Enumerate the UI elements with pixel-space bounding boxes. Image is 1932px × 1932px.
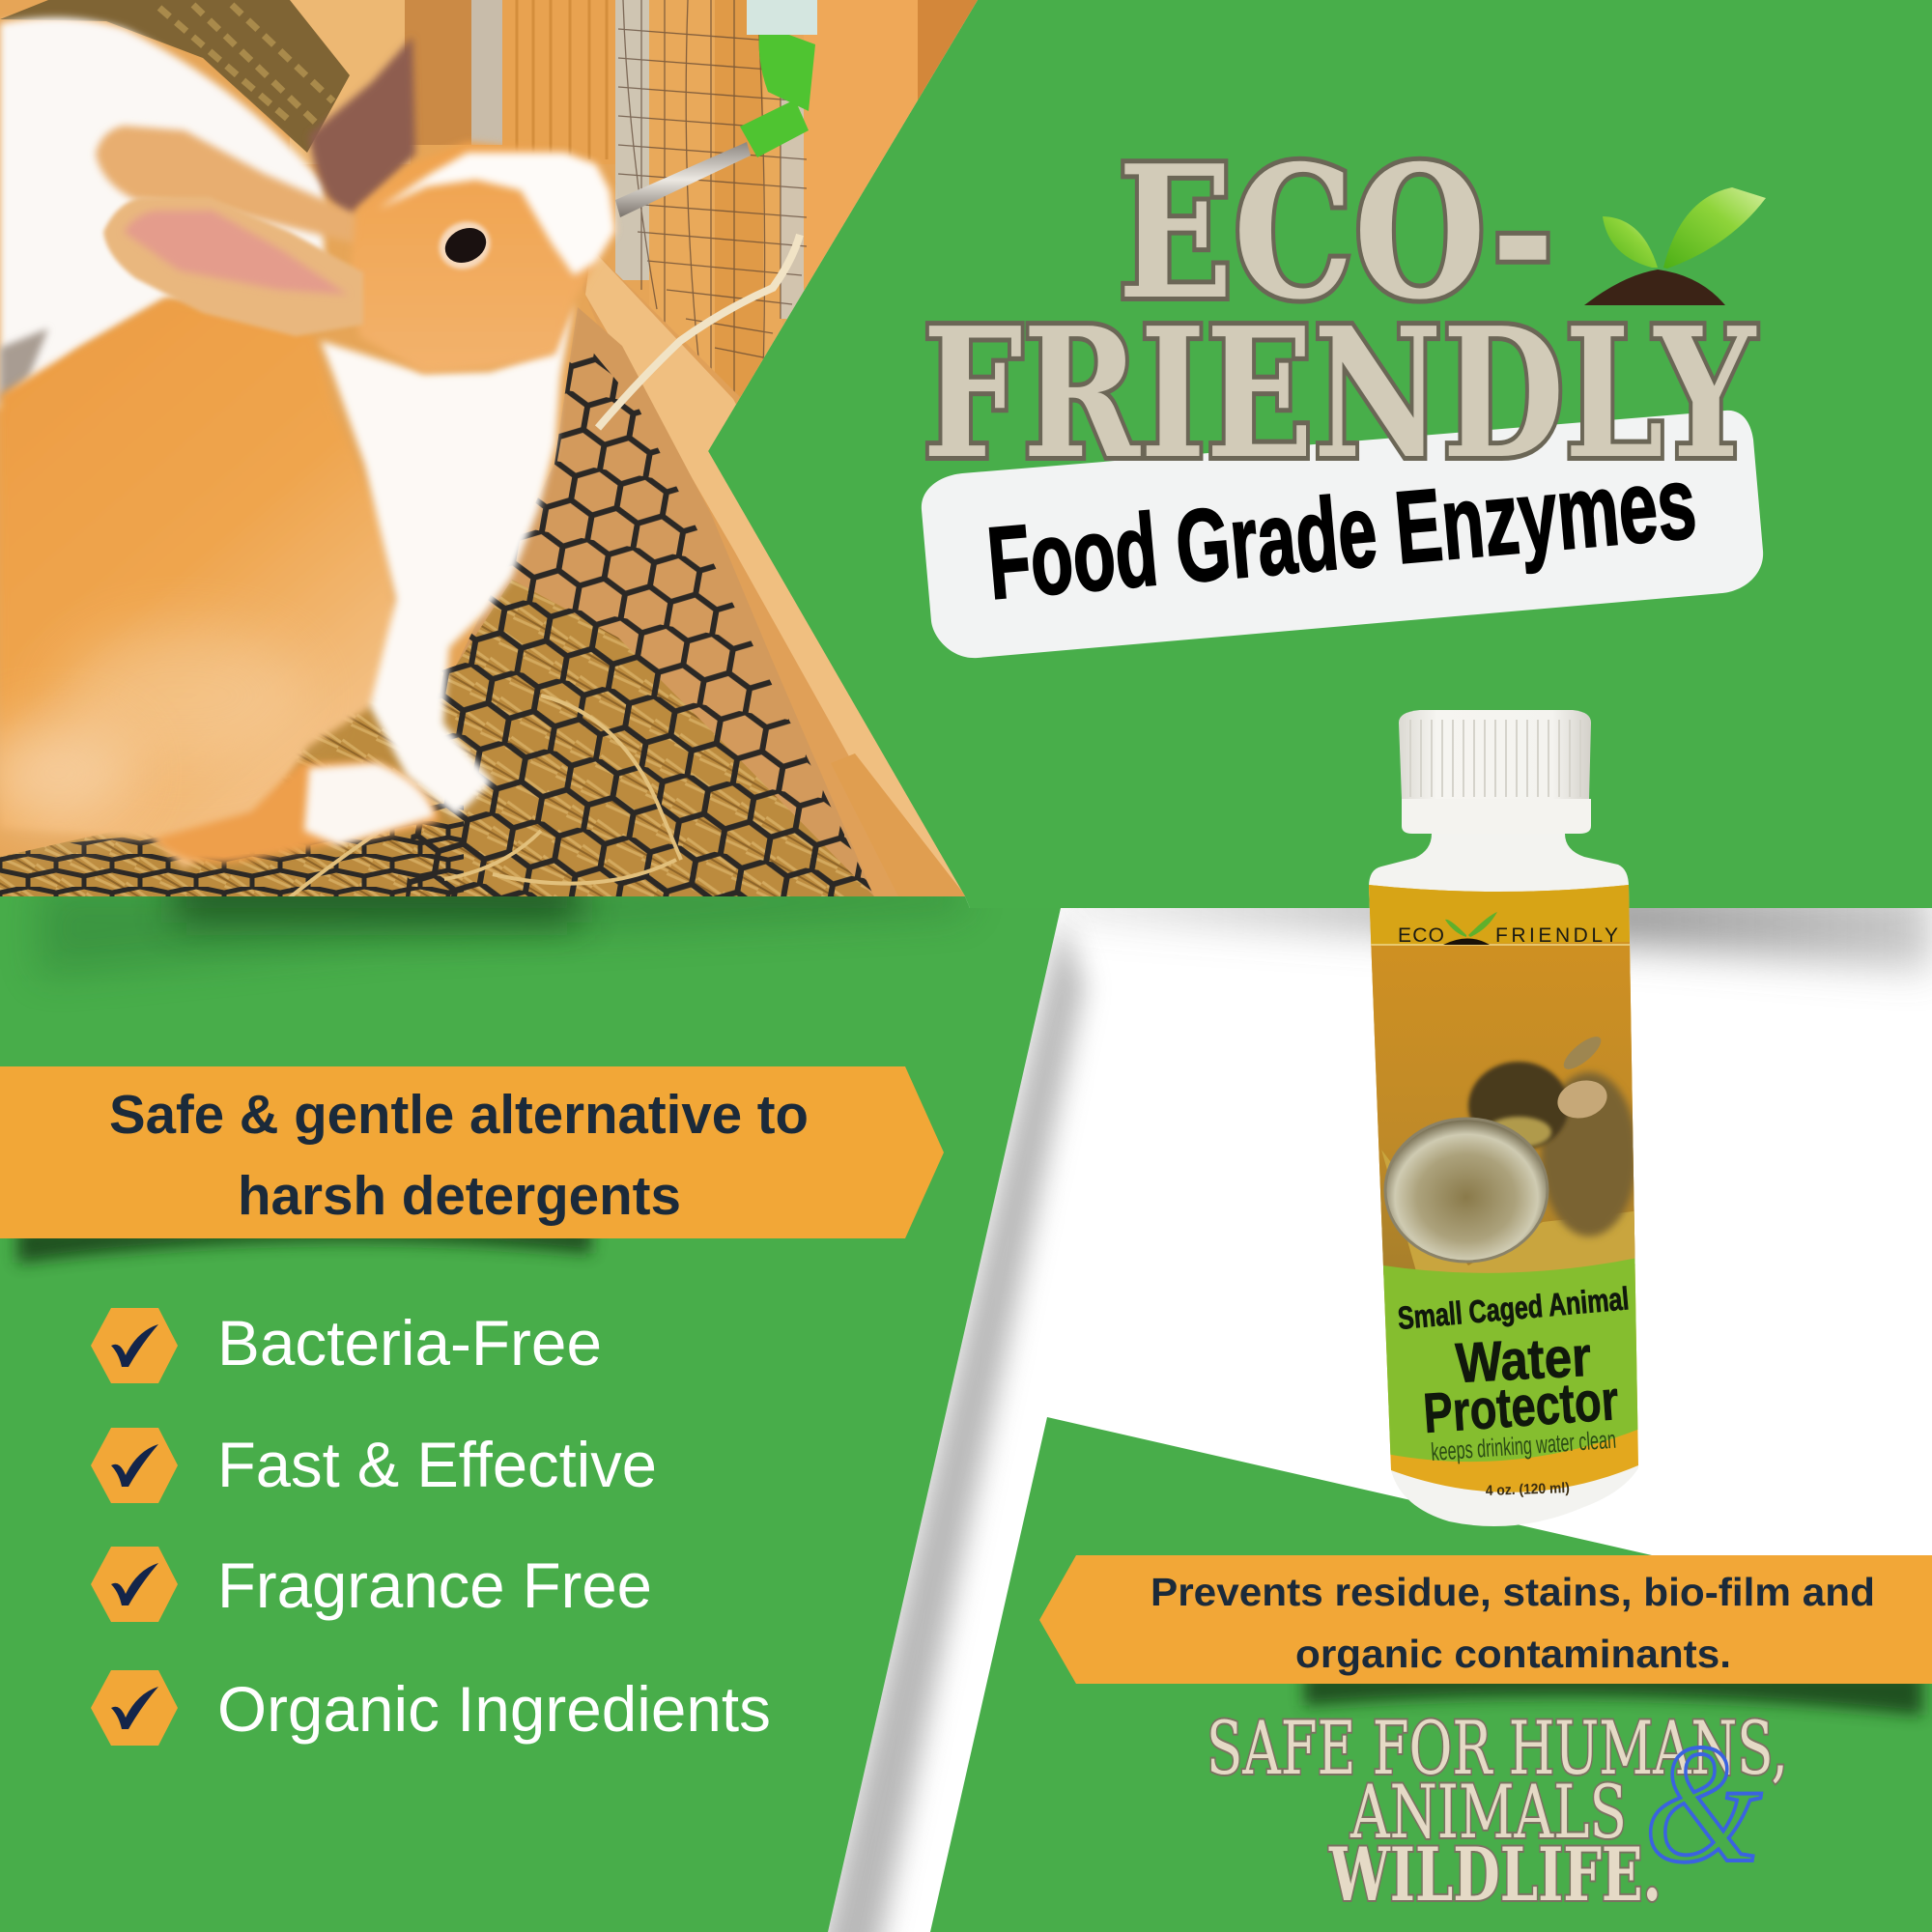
bottle body (1369, 834, 1638, 1526)
ampersand: & (1644, 1710, 1762, 1898)
head (348, 142, 615, 373)
cable tie (598, 235, 800, 428)
banner: prevents residue: organic contaminants. (1295, 1632, 1731, 1676)
banner shadow: right (1304, 1671, 1922, 1716)
label icon: sprout (1443, 912, 1497, 945)
label text: ECO FRIENDLY (1398, 924, 1618, 947)
main rabbit body (0, 298, 401, 868)
item: Bacteria-Free: Bacteria-Free (217, 1307, 602, 1378)
inner ear (124, 211, 348, 295)
tagline: safe for humans, animals and wildlife: WILDLIFE. (1328, 1832, 1662, 1918)
bottle cap (1399, 710, 1591, 799)
green band (1377, 1257, 1642, 1462)
checklist (91, 1307, 771, 1746)
banner: safe and gentle (0, 1066, 944, 1238)
drinking tube (615, 142, 751, 217)
label text: product name: Protector (1421, 1369, 1620, 1445)
panel: top green background (708, 0, 1932, 908)
white muzzle blaze (379, 153, 615, 275)
label text: product name: keeps drinking water clean (1430, 1425, 1617, 1466)
label (1362, 879, 1647, 1517)
label bowl (1385, 1119, 1548, 1262)
panel: bottom-left green (0, 896, 1061, 1932)
banner: prevents residue (1039, 1555, 1932, 1684)
tagline: safe for humans, animals and wildlife: ANIMALS (1350, 1769, 1627, 1855)
subtitle pill: food grade enzymes (922, 411, 1763, 658)
wooden board (615, 272, 965, 896)
straw in label (1381, 1150, 1642, 1285)
icon: seedling (1584, 187, 1766, 305)
label text: ECO FRIENDLY: ECO (1398, 924, 1444, 947)
hind foot (155, 761, 440, 864)
front ear (103, 197, 363, 336)
shadow: beneath photo on green panel (32, 896, 960, 979)
back ear (91, 120, 356, 243)
label rabbit (1541, 1072, 1637, 1236)
product bottle (1362, 710, 1647, 1526)
item: Fast and Effective: Fast & Effective (217, 1429, 657, 1500)
cap ring (1402, 799, 1591, 834)
straw floor and mesh (456, 307, 873, 895)
eye (437, 218, 493, 272)
tagline: safe for humans, animals and wildlife (1207, 1705, 1788, 1918)
item: Fragrance Free: Fragrance Free (217, 1549, 652, 1621)
shadow: under top green panel (1063, 889, 1932, 971)
panel: rabbit photo (0, 0, 985, 913)
woven mat (0, 0, 350, 153)
back rabbit ear (309, 37, 415, 217)
label text: product name: Small Caged Animal (1396, 1280, 1631, 1336)
shadow: along left panel edge (816, 918, 1084, 1932)
panel: bottom-right green (930, 1417, 1932, 1932)
water bottle (759, 35, 815, 111)
label text: product name: Water (1454, 1325, 1592, 1395)
title: ECO-FRIENDLY: ECO- (1118, 126, 1554, 340)
label text: product name (1396, 1280, 1631, 1499)
banner: prevents residue: Prevents residue, stains, bio-film and (1151, 1570, 1875, 1614)
bottle nozzle (740, 99, 809, 157)
label text: product name: 4 oz. (120 ml) (1486, 1480, 1570, 1499)
banner shadow: left (17, 1227, 591, 1264)
banner: safe and gentle: Safe & gentle alternative to (109, 1084, 809, 1146)
banner: safe and gentle: harsh detergents (238, 1165, 681, 1227)
white rabbit background (0, 17, 324, 411)
white chest (321, 301, 574, 816)
stray straw (288, 694, 683, 896)
top band line (1367, 944, 1642, 946)
item: Organic Ingredients: Organic Ingredients (217, 1673, 771, 1745)
title: ECO-FRIENDLY (923, 126, 1757, 498)
label text: ECO FRIENDLY: FRIENDLY (1495, 924, 1618, 947)
